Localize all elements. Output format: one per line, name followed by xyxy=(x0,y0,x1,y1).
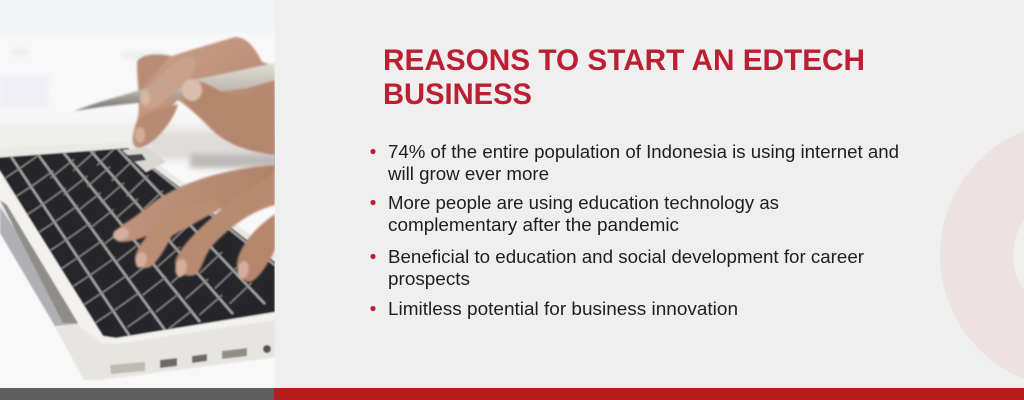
bottom bar: red xyxy=(274,388,1024,400)
keyboard xyxy=(0,148,275,338)
bullet 2: More people are using education technology as xyxy=(388,193,779,213)
laptop body xyxy=(0,146,275,380)
speaker strip xyxy=(0,207,78,326)
bullet 4: Limitless potential for business innovation xyxy=(388,299,738,319)
upper hand and pen xyxy=(74,37,275,155)
bullet 3: Beneficial to education and social development for career xyxy=(388,247,864,267)
laptop ports xyxy=(110,345,271,374)
bullet list xyxy=(370,142,899,319)
bullet 1 xyxy=(370,142,899,184)
bullet 2: complementary after the pandemic xyxy=(388,215,679,235)
photo: hands typing on a laptop xyxy=(0,35,275,388)
bullet 2 xyxy=(370,193,779,235)
title xyxy=(383,44,865,111)
title: BUSINESS xyxy=(383,78,532,111)
bullet 3: prospects xyxy=(388,269,470,289)
lower hand xyxy=(112,165,275,282)
bottom bar: gray xyxy=(0,388,274,400)
bullet 1: will grow ever more xyxy=(387,164,549,184)
bullet 1: 74% of the entire population of Indonesia is using internet and xyxy=(388,142,899,162)
bullet 3 xyxy=(370,247,864,289)
title: REASONS TO START AN EDTECH xyxy=(383,44,865,77)
decorative ring xyxy=(976,158,1024,352)
